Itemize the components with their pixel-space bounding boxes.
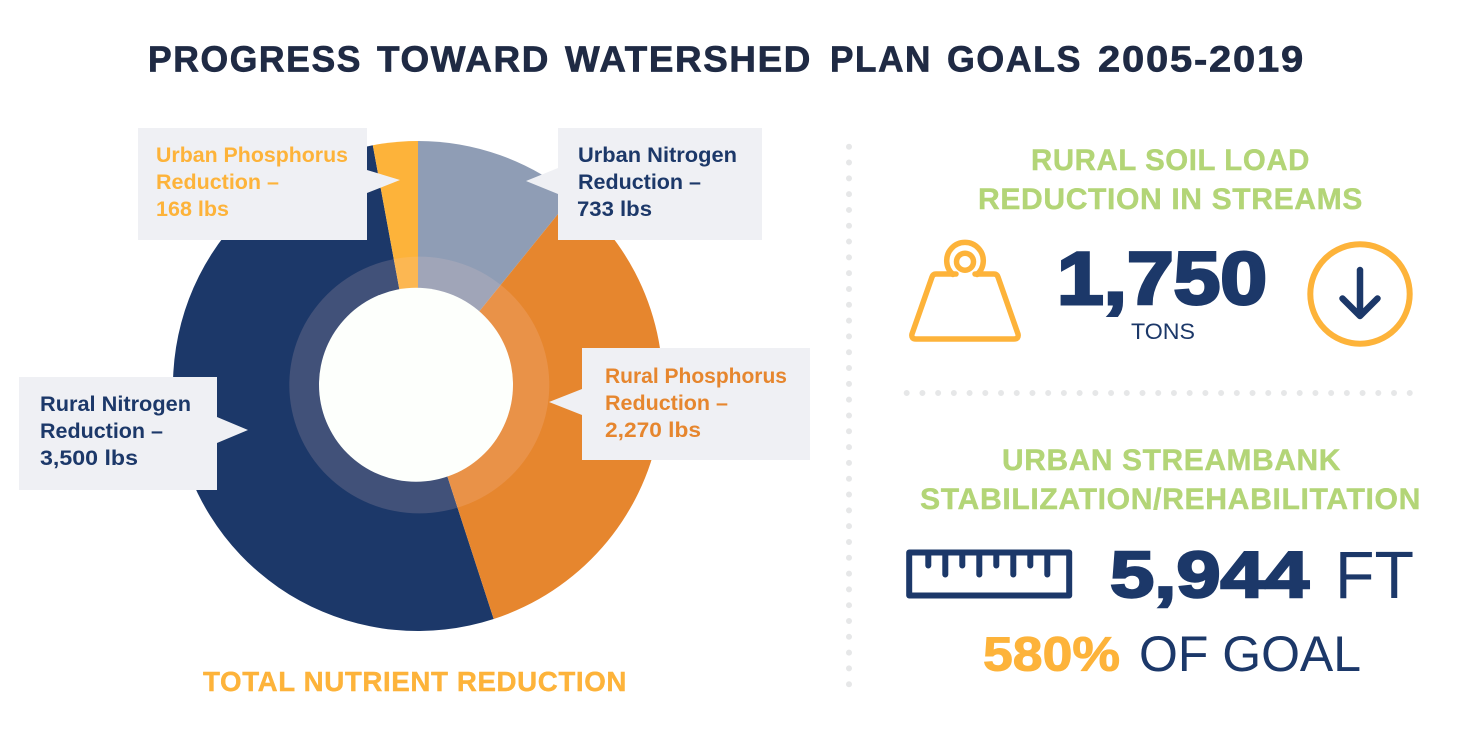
callout: urban nitrogen: Reduction – — [578, 171, 701, 194]
callout: urban nitrogen: 733 lbs — [577, 198, 652, 221]
title: WATERSHED — [565, 39, 812, 80]
heading: rural soil load: RURAL SOIL LOAD — [1031, 144, 1310, 177]
donut chart: total nutrient reduction — [173, 141, 663, 631]
segment: urban phosphorus — [373, 141, 418, 320]
callout: rural nitrogen: 3,500 lbs — [40, 447, 138, 470]
callout: urban phosphorus: Reduction – — [156, 171, 279, 194]
callout: urban phosphorus: Urban Phosphorus — [156, 144, 348, 167]
label: of goal: OF GOAL — [1139, 626, 1361, 682]
unit: tons: TONS — [1131, 319, 1195, 344]
title: TOWARD — [377, 39, 550, 80]
donut hole — [319, 288, 513, 482]
icon: ruler — [909, 552, 1069, 596]
stat: 1,750 tons: 1,750 — [1057, 237, 1267, 320]
heading: rural soil load: REDUCTION IN STREAMS — [978, 183, 1363, 216]
callout: rural nitrogen: Reduction – — [40, 420, 163, 443]
chart caption: TOTAL NUTRIENT REDUCTION — [203, 666, 627, 697]
segment: rural phosphorus — [418, 196, 663, 619]
segment: rural nitrogen — [173, 145, 494, 631]
callout: rural phosphorus: Reduction – — [605, 392, 728, 415]
unit: ft: FT — [1335, 538, 1414, 613]
stat: 580%: 580% — [983, 628, 1120, 682]
callout: urban phosphorus — [138, 128, 400, 240]
icon: down arrow in circle — [1310, 244, 1410, 344]
stat: 5,944: 5,944 — [1110, 538, 1309, 611]
callout: rural nitrogen — [19, 377, 248, 490]
segment: urban nitrogen — [418, 141, 573, 348]
callout: rural nitrogen: Rural Nitrogen — [40, 393, 191, 416]
title: 2005-2019 — [1098, 39, 1305, 80]
callout: urban nitrogen — [526, 128, 762, 240]
callout: rural phosphorus: 2,270 lbs — [605, 419, 701, 442]
title: GOALS — [947, 39, 1082, 80]
title — [148, 39, 1305, 80]
heading: urban streambank: URBAN STREAMBANK — [1002, 444, 1341, 477]
callout: urban nitrogen: Urban Nitrogen — [578, 144, 737, 167]
callout: urban phosphorus: 168 lbs — [156, 198, 229, 221]
heading: urban streambank: STABILIZATION/REHABILITATION — [920, 483, 1421, 516]
callout: rural phosphorus: Rural Phosphorus — [605, 365, 787, 388]
callout: rural phosphorus — [549, 348, 810, 460]
icon: weight — [912, 242, 1018, 339]
translucent ring — [289, 257, 549, 513]
title: PLAN — [830, 39, 932, 80]
title: PROGRESS — [148, 39, 362, 80]
